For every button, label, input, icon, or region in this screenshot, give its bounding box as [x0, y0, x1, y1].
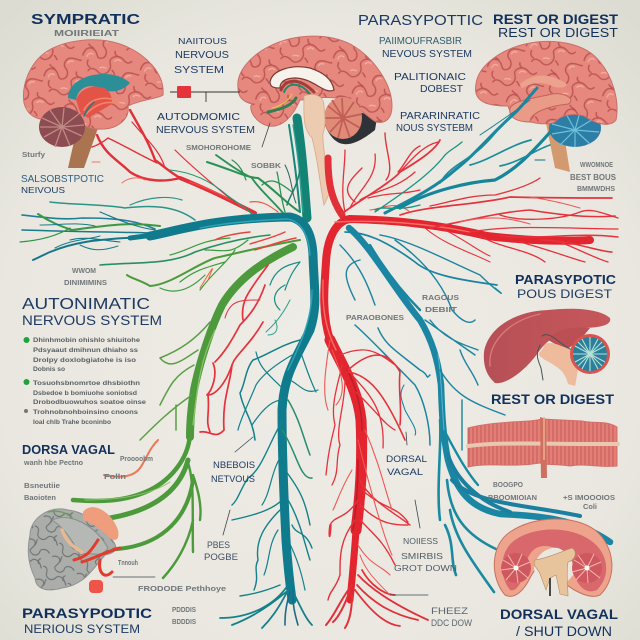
icon: red tag centre	[170, 86, 240, 102]
heading: dorsa vagal: DORSA VAGAL	[22, 442, 115, 457]
icon: liver lobe	[484, 309, 610, 383]
label: salsobstpotic: NEIVOUS	[21, 185, 65, 195]
label: paramotopic block: PARARINRATIC	[400, 111, 480, 122]
icon: right brainstem	[545, 118, 570, 172]
text block: bullet list: Drobodbuowuhos soatoe oinse	[33, 399, 146, 406]
nerve tree: central left web	[100, 232, 300, 310]
heading: parasypotic right: POUS DIGEST	[517, 287, 613, 301]
label: dorsal vagal centre: VAGAL	[387, 467, 423, 478]
icon: tan brainstem	[304, 94, 331, 205]
panel: right brain	[475, 41, 617, 172]
icon: grey lobes	[28, 509, 116, 590]
icon: blue cerebellum	[549, 109, 601, 147]
text block: bullet list: Tosuohsbnomrtoe dhsbiothn	[33, 380, 140, 387]
icon: gut crosspiece	[540, 417, 547, 478]
heading: parasypodtic bottom left	[22, 605, 152, 636]
label: small right notes: PARAOBONES	[346, 315, 404, 322]
label: pbes pogbe: PBES	[207, 540, 230, 550]
bullets	[24, 337, 30, 413]
label: autodmomic	[156, 112, 255, 136]
organ: liver	[484, 309, 610, 386]
label: nervous pair	[211, 460, 255, 484]
label: small right notes: Coli	[583, 504, 597, 511]
label: freeze: DDC DOW	[431, 618, 472, 628]
label: paramotopic block: PALITIONAIC	[394, 72, 466, 83]
label: small dorsa notes: Bsneutiie	[24, 483, 60, 490]
heading: rest or digest top: REST OR DIGEST	[493, 11, 618, 27]
label: autodmomic: NERVOUS SYSTEM	[156, 125, 255, 136]
label: autodmomic: AUTODMOMIC	[157, 112, 240, 123]
text block: bullet list: Dsbedoe b bomiuohe soniobsd	[33, 390, 137, 397]
label: shut down centre: NOIIESS	[403, 536, 438, 546]
label: small dorsa notes	[23, 456, 226, 626]
heading: rest or digest top	[493, 11, 618, 40]
label: small dorsa notes: wanh hbe Pectno	[23, 460, 83, 467]
heading: dorsal vagal shut down	[500, 607, 618, 639]
label: small left notes: WWOM	[72, 268, 96, 275]
label: nervous pair: NETVOUS	[211, 474, 255, 484]
label: shut down centre	[394, 536, 457, 573]
nerve tree: teal upper right	[375, 88, 552, 213]
label: pbes pogbe: POGBE	[204, 552, 238, 562]
icon: gallbladder duct	[539, 343, 578, 386]
heading: parasypotic right	[515, 273, 616, 301]
text block: bullet list: Trohnobnohboinsino cnoons	[33, 409, 138, 416]
icon: pancreas wheel	[570, 334, 610, 374]
text block: bullet list: Ioal chlb Trahe bconinbo	[33, 419, 111, 426]
label: small left notes	[22, 145, 281, 287]
label: shut down centre: SMIRBIS	[401, 551, 443, 561]
icon: grey upper lobe	[52, 518, 108, 555]
panel: centre brain	[238, 36, 392, 218]
heading: autonimatic: NERVOUS SYSTEM	[22, 312, 162, 328]
icon: red nerve bundle	[74, 540, 120, 575]
nerve tree: red bottom fan	[326, 555, 428, 628]
label: salsobstpotic: SALSOBSTPOTIC	[21, 174, 104, 185]
heading: autonimatic	[22, 296, 162, 328]
heading: parasypottic top: PARASYPOTTIC	[358, 13, 483, 29]
label: small right notes	[346, 162, 617, 511]
heading: parasypotic right: PARASYPOTIC	[515, 273, 616, 287]
label: pbes pogbe	[204, 540, 238, 562]
nerve tree: upper green	[170, 155, 300, 215]
nerve tree: left teal and green fan	[20, 197, 195, 260]
nerve: blue descending trunk	[349, 228, 610, 592]
icon: left cerebrum	[23, 40, 163, 129]
nerve: main teal trunk	[130, 217, 315, 600]
label: nervous system top	[174, 36, 229, 76]
label: small dorsa notes: FRODODE Pethhoye	[138, 586, 226, 593]
icon: dark cerebellum fan	[322, 105, 377, 144]
icon: left cerebellum	[39, 107, 85, 147]
heading: autonimatic: AUTONIMATIC	[22, 296, 150, 313]
icon: kidney centre hilum	[534, 548, 575, 596]
label: small right notes: BOOGPO	[493, 482, 524, 489]
label: dorsal vagal centre: DORSAL	[386, 454, 427, 465]
text block: bullet list: Pdsyaaut dmihnun dhiaho ss	[33, 347, 138, 354]
nerve tree: centre left red	[200, 265, 268, 435]
nerve tree: blue web below red	[340, 232, 505, 450]
label: small right notes: RAGOUS	[422, 295, 459, 302]
heading: parasypodtic bottom left: NERIOUS SYSTEM	[24, 622, 140, 636]
panel: left brain	[23, 40, 163, 168]
label: moiiriet: MOIIRIEIAT	[54, 29, 119, 38]
icon: centre cerebellum	[324, 97, 362, 139]
organ: grey brain	[28, 507, 120, 590]
icon: gut band	[468, 444, 618, 446]
nerve: green trunk with branches	[73, 247, 293, 578]
label: paramotopic block	[379, 36, 480, 134]
red note scribble	[104, 440, 158, 477]
icon: kidney outer	[494, 519, 612, 596]
nerve tree: lower teal fan	[220, 300, 318, 628]
label: paramotopic block: PAIIMOUFRASBIR	[379, 36, 462, 47]
icon: liver rear lobe	[548, 327, 590, 350]
label: paramotopic block: NOUS SYSTEBM	[396, 123, 473, 134]
label: small dorsa notes: Folln	[104, 474, 126, 481]
label: small dorsa notes: BDDDIS	[172, 619, 196, 626]
heading: rest or digest middle: REST OR DIGEST	[491, 392, 615, 407]
icon: right inner tract	[520, 76, 567, 88]
organ: intestine	[468, 417, 618, 478]
label: small right notes: BEST BOUS	[570, 173, 617, 182]
label: small left notes: SOBBK	[251, 163, 281, 170]
label: small right notes: +S IMOOOIOS	[563, 495, 615, 502]
label: small dorsa notes: PDDDIS	[172, 607, 196, 614]
icon: kidney inner	[502, 530, 606, 591]
label: freeze: FHEEZ	[431, 606, 469, 616]
heading: parasypodtic bottom left: PARASYPODTIC	[22, 605, 152, 621]
icon: red spinal tract	[328, 158, 342, 215]
heading: dorsal vagal shut down: / SHUT DOWN	[516, 624, 612, 639]
icon: centre cerebrum	[238, 36, 392, 126]
label: nervous system top: NAIITOUS	[178, 36, 227, 46]
label: paramotopic block: DOBEST	[420, 84, 463, 95]
nerve tree: red upper right	[340, 133, 618, 262]
heading: rest or digest top: REST OR DIGEST	[498, 26, 618, 40]
label: small dorsa notes: Baoioten	[24, 495, 56, 502]
label: small right notes: BMMWDHS	[577, 186, 615, 193]
icon: teal spinal tracts	[289, 118, 307, 218]
icon: inner tract bundle	[268, 81, 314, 112]
nerve: main red trunk	[323, 219, 590, 600]
organ: kidney	[494, 519, 612, 596]
icon: kidney left wheel	[501, 553, 531, 583]
marker lines	[113, 123, 428, 595]
icon: gut folds	[468, 419, 617, 467]
icon: left brainstem	[68, 124, 98, 168]
label: paramotopic block: NEVOUS SYSTEM	[382, 49, 472, 60]
heading: sympratic: SYMPRATIC	[31, 12, 141, 28]
text block: bullet list: Dobnis so	[33, 366, 65, 373]
label: small right notes: WWOMNOE	[580, 162, 613, 169]
icon: corpus callosum	[270, 67, 334, 91]
label: nervous system top: SYSTEM	[174, 65, 224, 76]
label: small right notes: DEBIIT	[425, 307, 458, 314]
label: dorsal vagal centre	[386, 454, 427, 478]
text block: bullet list	[33, 337, 146, 426]
icon: right inner lobe	[510, 94, 571, 122]
label: small right notes: BBOOMIOIAN	[488, 495, 537, 502]
label: nervous system top: NERVOUS	[175, 50, 229, 61]
icon: kidney hilum gap	[534, 548, 574, 590]
label: shut down centre: GROT DOWN	[394, 563, 457, 573]
text block: bullet list: Dhinhmobin ohishlo shiuitohe	[33, 337, 140, 344]
label: small left notes: Sturfy	[22, 152, 45, 159]
icon: left corpus arc	[68, 74, 130, 118]
icon: salmon gland	[83, 507, 118, 540]
label: small left notes: SMOHOROHOME	[186, 145, 251, 152]
text block: bullet list: Drolpy doxlobgiatohe is iso	[33, 357, 136, 364]
label: small left notes: DINIMIMINS	[64, 280, 107, 287]
nerve tree: red lower fan	[325, 340, 410, 600]
label: salsobstpotic	[21, 174, 104, 195]
label: small dorsa notes: Tnnouh	[118, 560, 138, 567]
icon: right cerebrum	[475, 41, 617, 124]
icon: red tag bottom	[89, 580, 103, 593]
icon: kidney right wheel	[572, 553, 602, 583]
heading: dorsal vagal shut down: DORSAL VAGAL	[500, 607, 618, 622]
label: nervous pair: NBEBOIS	[213, 460, 255, 470]
label: freeze	[431, 606, 472, 628]
nerve tree: upper red left	[92, 110, 278, 213]
label: small dorsa notes: Proooobm	[120, 456, 153, 463]
